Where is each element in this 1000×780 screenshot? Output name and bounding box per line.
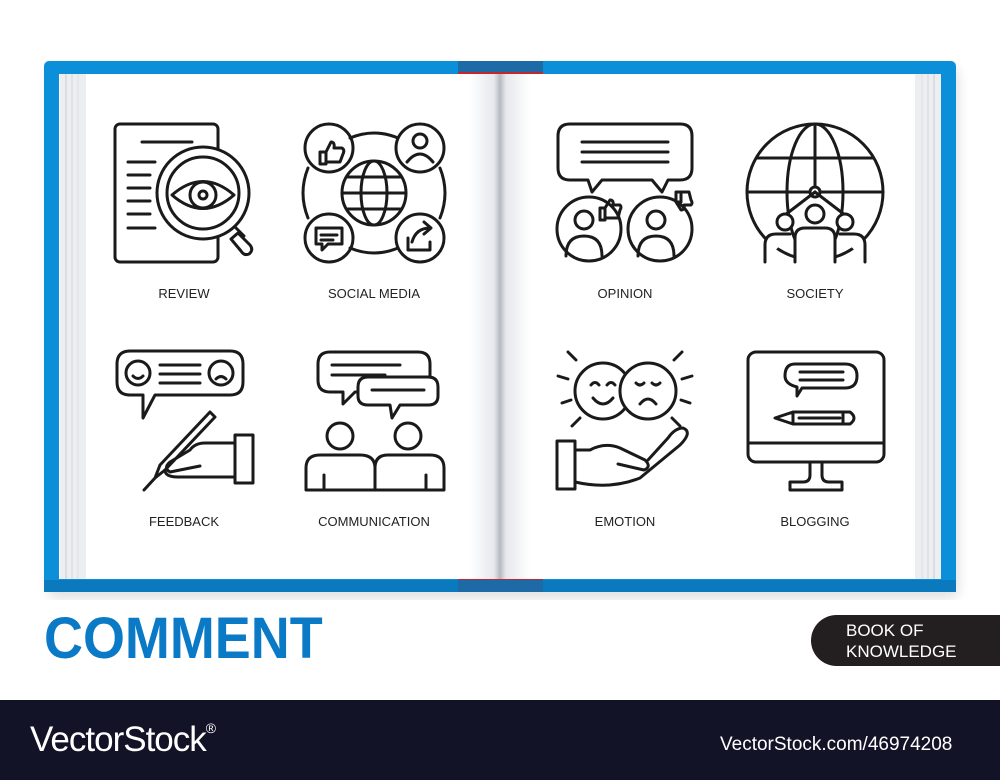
icon: blogging: [748, 352, 884, 490]
footer: VectorStock.com/46974208: [720, 734, 952, 755]
icon: communication: [306, 352, 444, 490]
icon: social media: [303, 124, 445, 262]
labels: SOCIETY: [786, 286, 844, 301]
labels: REVIEW: [158, 286, 210, 301]
icon: opinion: [557, 124, 692, 261]
icons panel: [114, 122, 886, 492]
labels: BLOGGING: [780, 514, 850, 529]
icon: society: [747, 124, 883, 262]
labels: COMMUNICATION: [318, 514, 430, 529]
labels: OPINION: [598, 286, 652, 301]
badge: KNOWLEDGE: [846, 642, 957, 661]
icon: feedback: [117, 351, 253, 490]
labels: [149, 286, 850, 529]
icon: review: [115, 124, 252, 262]
icon: emotion: [557, 352, 692, 489]
footer: VectorStock®: [30, 720, 215, 759]
labels: FEEDBACK: [149, 514, 219, 529]
footer: [0, 700, 1000, 780]
labels: SOCIAL MEDIA: [328, 286, 420, 301]
book: [44, 61, 962, 600]
labels: EMOTION: [595, 514, 655, 529]
badge: BOOK OF: [846, 621, 923, 640]
badge: [811, 615, 1000, 666]
title: COMMENT: [44, 606, 323, 671]
